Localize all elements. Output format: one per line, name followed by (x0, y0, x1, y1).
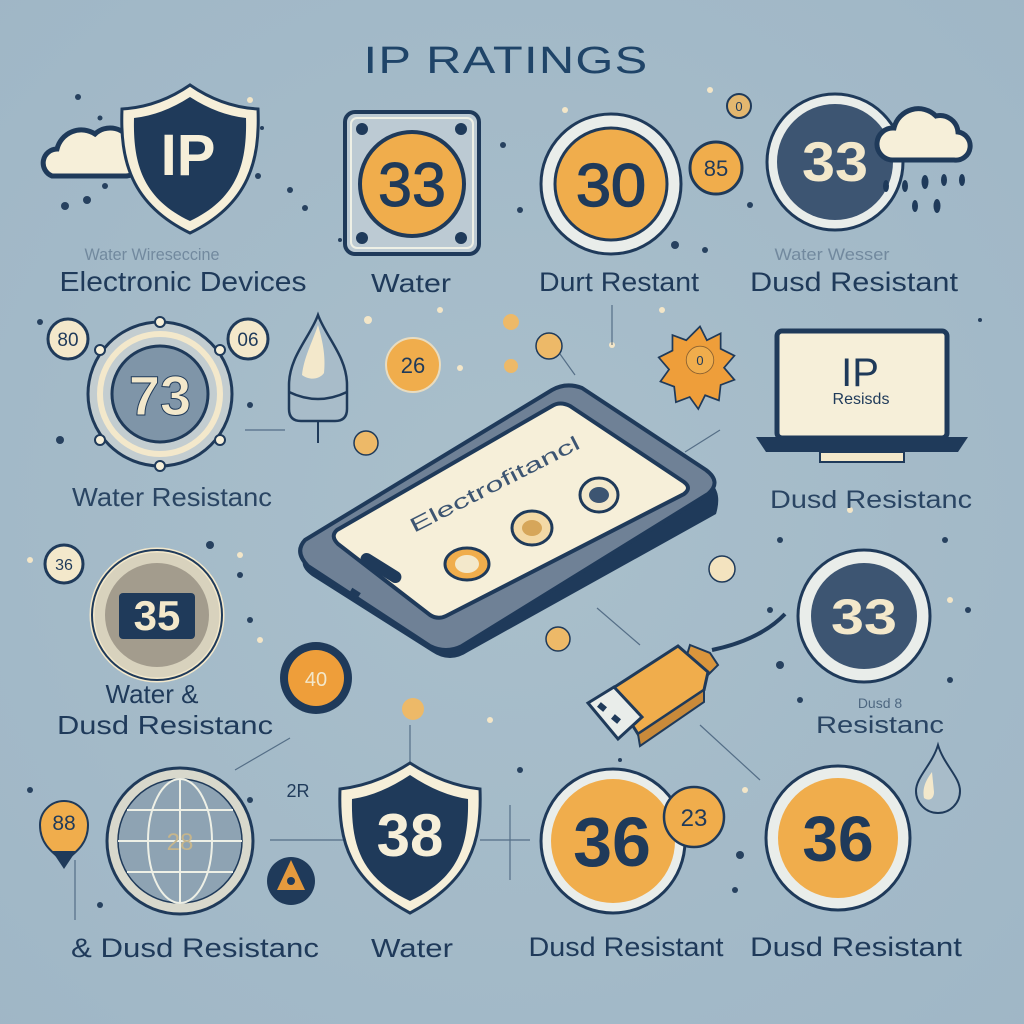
icon: orange gear: 0 (696, 353, 704, 368)
icon: small badge 06: 06 (237, 330, 259, 351)
label: water resistance: Water Resistanc (72, 482, 272, 512)
label: water and dust resistance: Water & (106, 679, 198, 709)
icon: ring dial 73: 73 (129, 364, 191, 427)
icon: shield 38: 38 (377, 802, 443, 869)
icon: globe: 28 (167, 829, 193, 856)
icon: pin 88: 88 (52, 812, 76, 835)
icon: shield IP: IP (161, 123, 215, 188)
title: IP RATINGS (364, 40, 648, 82)
icon: orange badge (280, 642, 352, 714)
label: dusd resistant bottom: Dusd Resistant (528, 932, 724, 962)
icon: small orange hazard (267, 857, 315, 905)
icon: small badge 06 (228, 319, 268, 359)
icon: small badge top (727, 94, 751, 118)
icon: small badge top: 0 (735, 99, 743, 114)
icon: small badge 23: 23 (681, 805, 707, 832)
icon: square badge 33: 33 (378, 151, 446, 220)
icon: circle 33 right: 33 (831, 589, 897, 645)
icon: usb plug (588, 614, 785, 746)
icon: circle 36 (541, 769, 685, 913)
label: electronic devices: Electronic Devices (60, 266, 306, 297)
icon: laptop (756, 331, 968, 462)
icon: square badge 33 (345, 112, 479, 254)
icon: small badge 36 left: 36 (55, 557, 73, 574)
label: and dust resistant bottom left: & Dusd Resistanc (71, 933, 319, 963)
icon: cloud left (43, 128, 142, 176)
icon: water drop (289, 315, 347, 443)
icon: shield IP (122, 85, 258, 233)
icon: dial 35 (92, 550, 222, 680)
icon: circle 30 (541, 114, 681, 254)
label: dusd resistant top: Dusd Resistant (750, 267, 959, 297)
decorative connector lines (75, 305, 760, 920)
label: electronic devices: Water Wireseccine (84, 245, 220, 264)
icon: badge 26: 26 (401, 353, 425, 378)
label: water and dust resistance (57, 679, 273, 740)
icon: laptop: Resisds (833, 391, 889, 408)
icon: dial 35: 35 (134, 592, 180, 639)
label: dusd resistance right: Dusd Resistanc (770, 486, 972, 514)
icon: screen button middle (512, 511, 552, 545)
icon: circle 33 top right (767, 94, 903, 230)
label: resistance right: Resistanc (816, 712, 944, 739)
icon: small badge 85 (690, 142, 742, 194)
icon: small badge 36 left (45, 545, 83, 583)
icon: circle 30: 30 (576, 152, 646, 219)
label: resistance right: Dusd 8 (858, 695, 902, 711)
device: central tablet (300, 385, 718, 658)
icon: orange dots (354, 314, 735, 720)
decorative light dots (27, 87, 953, 793)
icon: laptop: IP (841, 351, 879, 395)
icon: badge 26 (386, 338, 440, 392)
icon: small label 2R: 2R (286, 781, 310, 801)
label: electronic devices (60, 245, 306, 297)
text: screen label: Electrofitancl (406, 433, 584, 537)
label: dusd resistant top: Water Wesser (774, 245, 890, 264)
icon: orange gear (659, 326, 734, 409)
icon: small badge 23 (664, 787, 724, 847)
label: dusd resistant bottom right: Dusd Resistant (750, 932, 963, 962)
icon: screen button right (580, 478, 618, 512)
icon: small badge 85: 85 (704, 156, 728, 181)
icon: circle 33 top right: 33 (802, 130, 868, 193)
icon: circle 33 right (798, 550, 930, 682)
label: water and dust resistance: Dusd Resistanc (57, 710, 273, 740)
icon: circle 36: 36 (573, 803, 651, 881)
label: water: Water (371, 268, 451, 298)
icon: orange badge: 40 (305, 669, 327, 691)
icon: globe (107, 768, 253, 914)
icon: pin 88 (40, 801, 88, 869)
icon: ring dial 73 (88, 317, 232, 471)
icon: small badge 80 (48, 319, 88, 359)
decorative dots (27, 94, 982, 908)
icon: water drop small (916, 745, 960, 813)
icon: small badge 80: 80 (57, 330, 79, 351)
icon: circle 36 right: 36 (802, 803, 874, 875)
label: resistance right (816, 695, 944, 739)
icon: circle 36 right (766, 766, 910, 910)
label: dusd resistant top (750, 245, 959, 297)
label: durt resistant: Durt Restant (539, 267, 700, 297)
icon: cloud right with rain (877, 109, 970, 213)
icon: shield 38 (340, 763, 480, 913)
label: water bottom: Water (371, 933, 453, 963)
icon: screen button left (445, 548, 489, 580)
